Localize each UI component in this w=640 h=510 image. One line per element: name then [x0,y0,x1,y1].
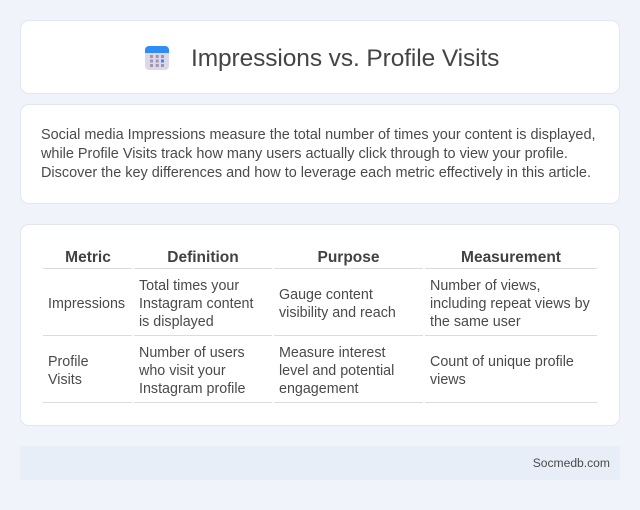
cell: Profile Visits: Profile [48,354,89,370]
cell: Impressions definition [139,278,254,330]
cell: Profile Visits measurement: Count of unique profile [430,354,574,370]
cell: Profile Visits purpose: engagement [279,381,358,397]
cell: Impressions purpose: Gauge content [279,287,373,303]
cell: Profile Visits measurement: views [430,372,466,388]
text: intro line 2: while Profile Visits track how many users actually click through to view your profile. [41,146,568,162]
cell: Impressions purpose [279,287,396,321]
cell: Profile Visits: Visits [48,372,82,388]
cell: Impressions: Impressions [48,296,125,312]
cell: Profile Visits definition: Number of users [139,345,245,361]
cell: Impressions definition: Total times your [139,278,239,294]
text: source: Socmedb.com [533,456,610,470]
cell: Profile Visits purpose: Measure interest [279,345,385,361]
cell: Profile Visits definition [139,345,245,397]
title: Impressions vs. Profile Visits [191,45,499,72]
heading: Purpose: Purpose [317,248,380,266]
cell: Impressions measurement: including repeat views by [430,296,590,312]
icon: calendar [145,46,169,70]
heading: Measurement: Measurement [461,248,561,266]
text: intro line 3: Discover the key differences and how to leverage each metric effectively in this article. [41,165,591,181]
text: intro line 1: Social media Impressions measure the total number of times your content is displayed, [41,127,596,143]
panel: title card [20,20,620,94]
cell: Impressions measurement: the same user [430,314,521,330]
heading: Metric: Metric [65,248,111,266]
cell: Profile Visits purpose [279,345,394,397]
cell: Impressions measurement: Number of views, [430,278,540,294]
cell: Profile Visits definition: Instagram profile [139,381,245,397]
footer bar [20,446,620,480]
heading: Definition: Definition [167,248,239,266]
panel: comparison table [20,224,620,426]
cell: Impressions purpose: visibility and reach [279,305,396,321]
cell: Profile Visits purpose: level and potential [279,363,394,379]
cell: Profile Visits definition: who visit your [139,363,226,379]
cell: Impressions measurement [430,278,590,330]
panel: intro text [20,104,620,204]
cell: Impressions definition: is displayed [139,314,214,330]
cell: Impressions definition: Instagram content [139,296,253,312]
cell: Profile Visits measurement [430,354,574,388]
cell: Profile Visits [48,354,89,388]
